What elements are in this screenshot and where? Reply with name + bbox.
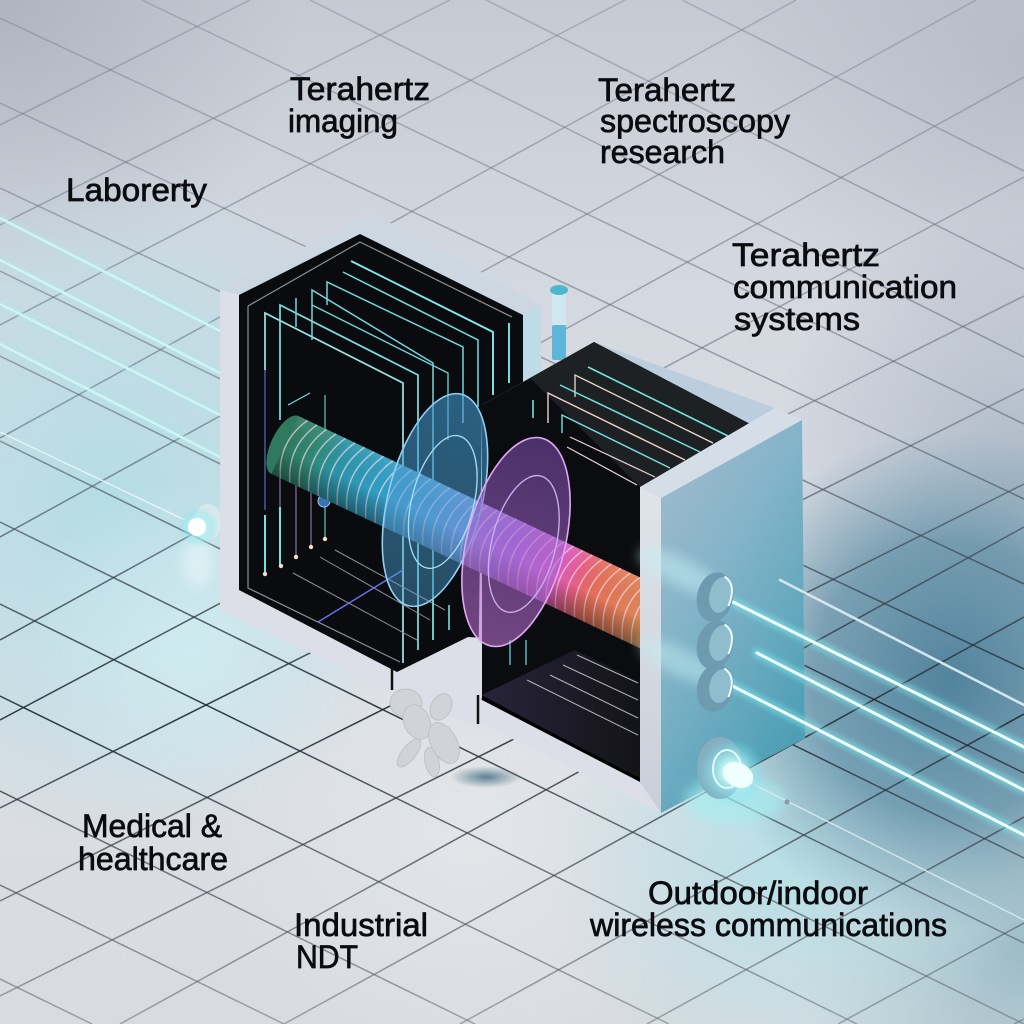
left chamber neon frames (248, 242, 512, 663)
label: Industrial NDT: NDT (296, 939, 358, 975)
left incoming beams (0, 218, 220, 520)
icon: output ports (692, 569, 738, 715)
label: Terahertz communication systems: systems (734, 301, 860, 337)
panel: left module housing (220, 213, 541, 730)
label: Terahertz spectroscopy research: Terahertz (598, 72, 736, 108)
label: Industrial NDT: Industrial (294, 907, 428, 943)
icon: metal fan emblem (390, 667, 522, 788)
outgoing beams (713, 580, 1024, 920)
label: Terahertz communication systems (732, 237, 957, 337)
lens: purple translucent disc (443, 426, 589, 658)
label: Laborerty: Laborerty (66, 172, 207, 208)
label: Medical & healthcare: Medical & (82, 808, 222, 844)
chart: rainbow ribbed terahertz tube (259, 410, 674, 651)
label: Medical & healthcare (78, 808, 228, 877)
label: Outdoor/indoor wireless communications: Outdoor/indoor (648, 875, 868, 911)
dark chamber of right module (482, 342, 752, 782)
label: Terahertz communication systems: Terahertz (732, 237, 880, 273)
label: Terahertz imaging: Terahertz (290, 71, 430, 107)
label: Outdoor/indoor wireless communications: wireless communications (589, 907, 947, 943)
icon: left light source (178, 504, 222, 586)
label: Terahertz imaging: imaging (288, 103, 398, 139)
label: Terahertz spectroscopy research: research (600, 134, 725, 170)
icon: output light source (697, 737, 790, 806)
label: Medical & healthcare: healthcare (78, 841, 228, 877)
label: Terahertz spectroscopy research: spectroscopy (600, 103, 790, 139)
label: Terahertz spectroscopy research (598, 72, 790, 170)
icon: vial connector (550, 285, 568, 360)
dark chamber of left module (239, 234, 523, 672)
label: Terahertz imaging (288, 71, 430, 139)
panel: right module side face (633, 408, 805, 824)
right chamber ceiling and floor (482, 342, 752, 780)
label: Industrial NDT (294, 907, 428, 975)
panel: right module housing (478, 342, 805, 813)
label: Terahertz communication systems: communication (733, 269, 957, 305)
label: Outdoor/indoor wireless communications (589, 875, 947, 943)
lens: blue translucent disc (363, 383, 507, 617)
